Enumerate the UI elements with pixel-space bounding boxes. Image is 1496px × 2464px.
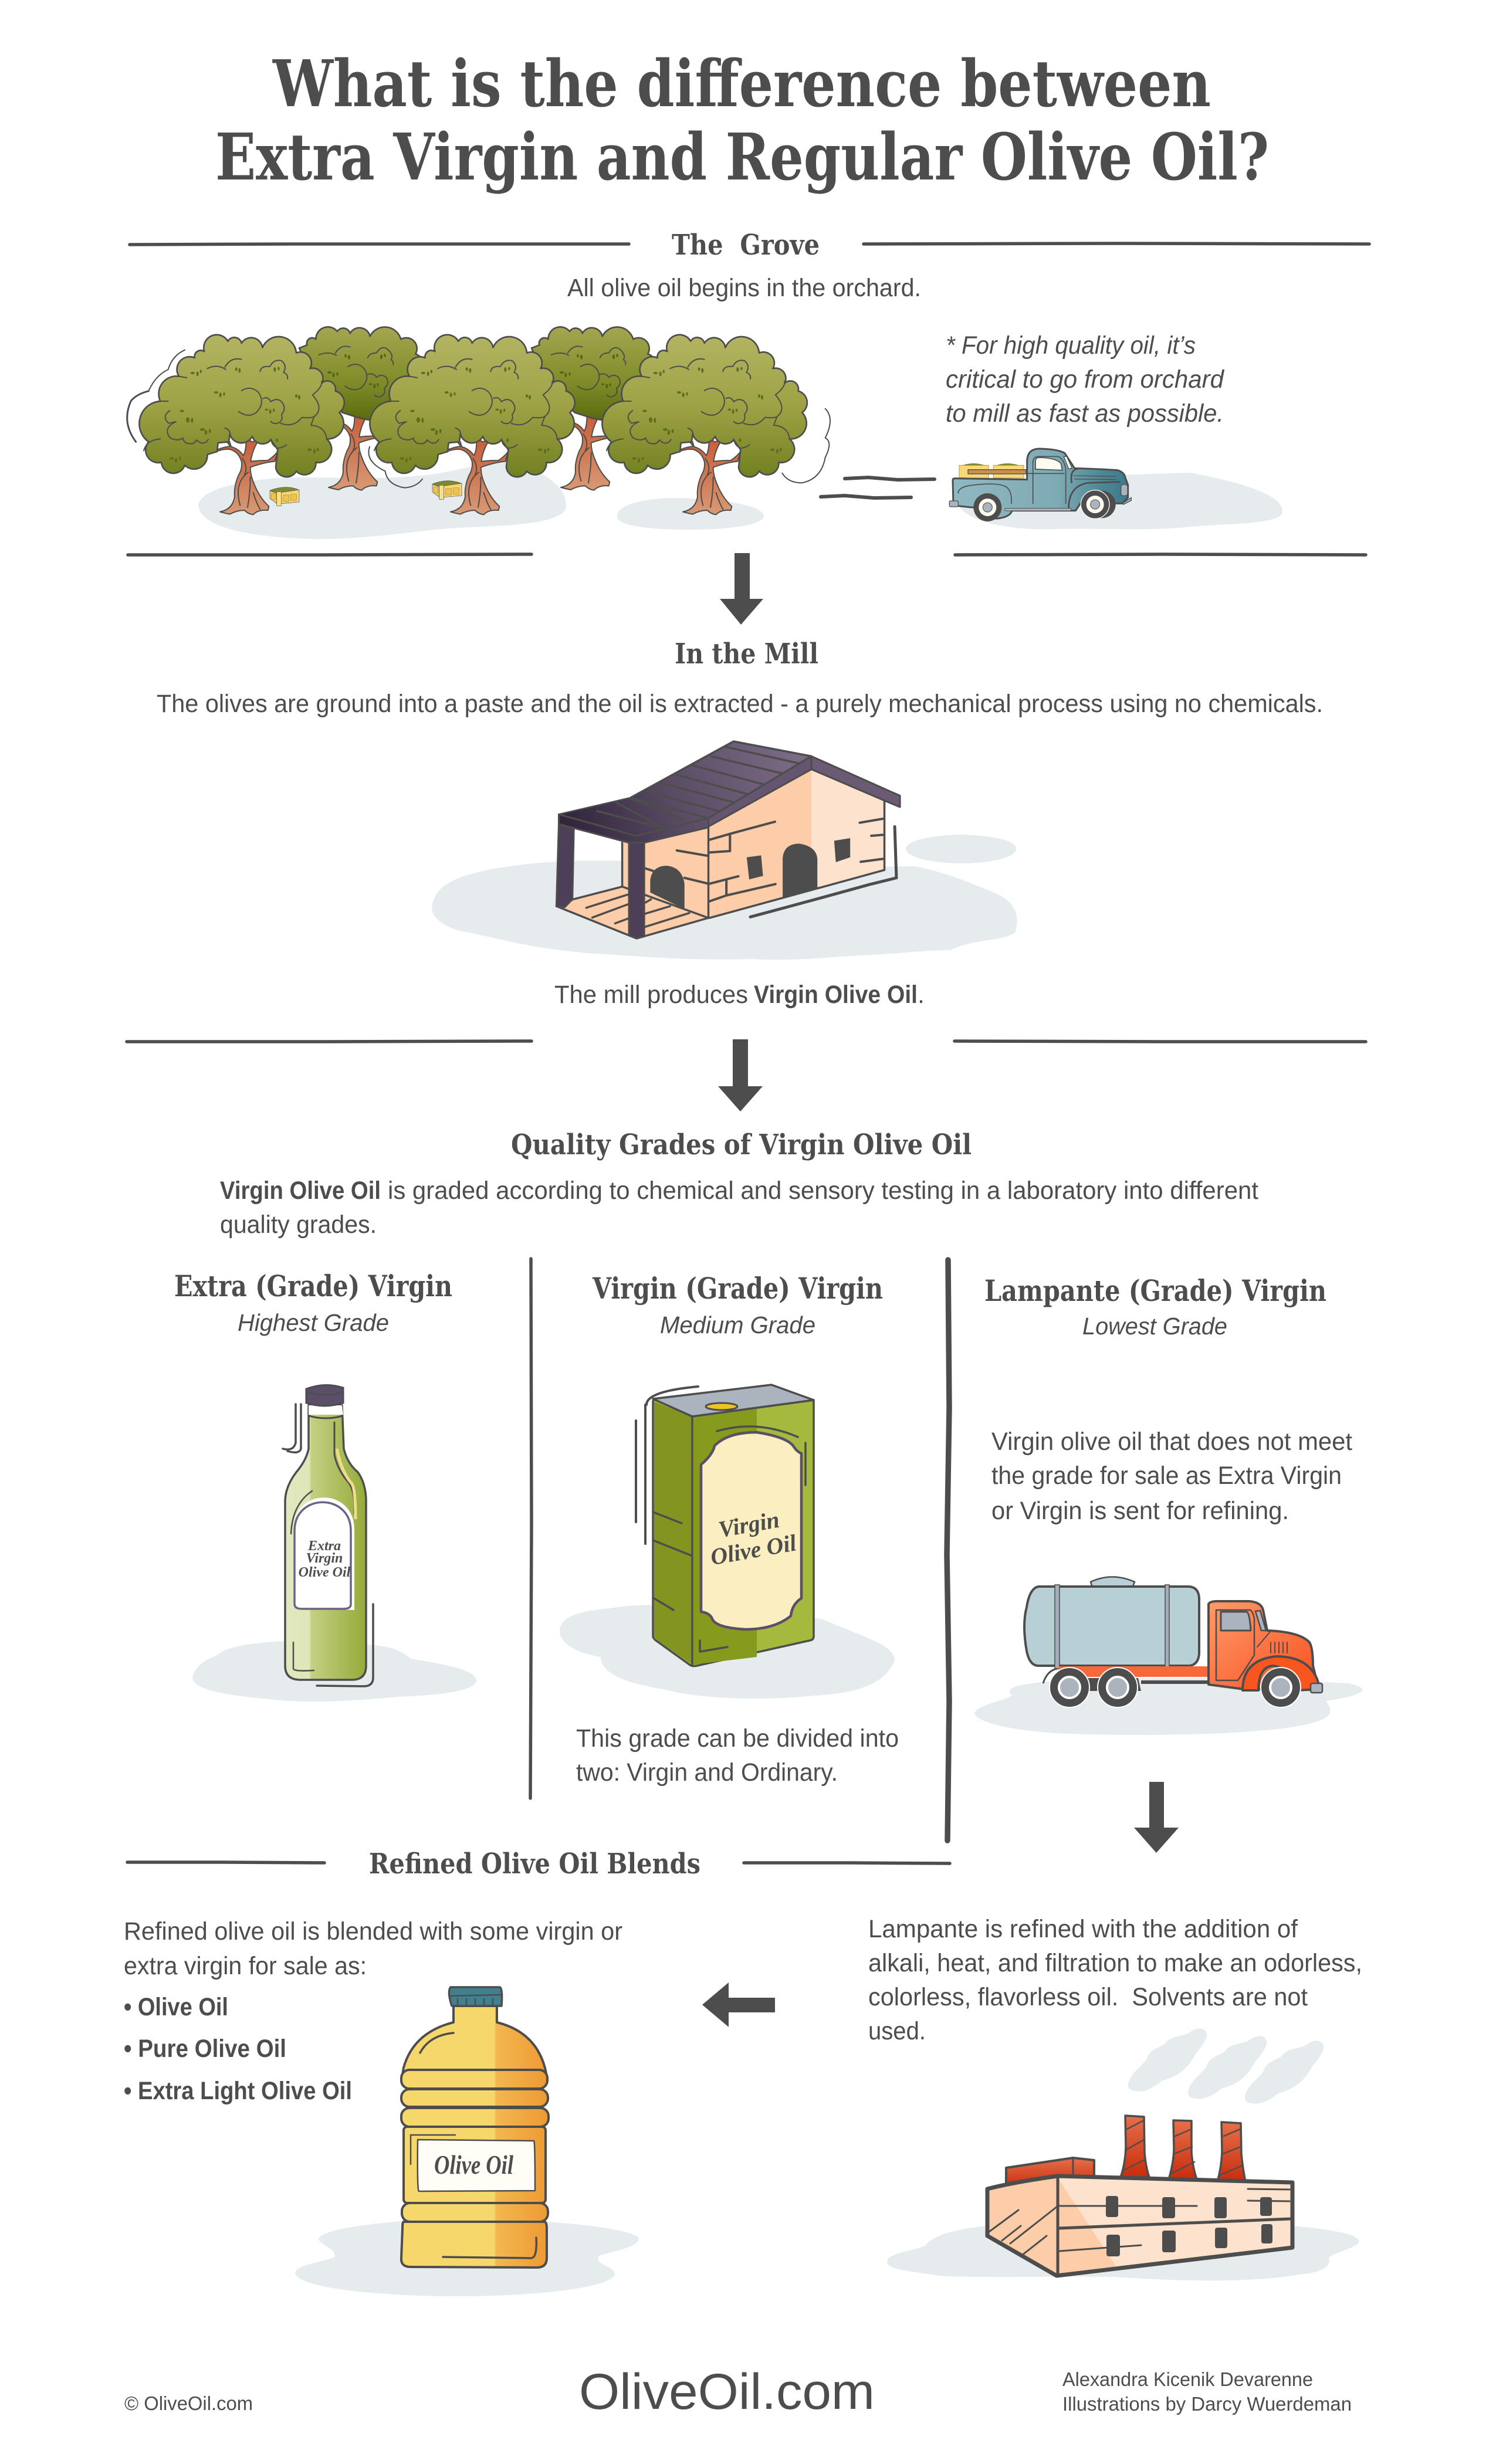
illustration: olive oil tin <box>636 1385 814 1666</box>
heading: extra virgin: Extra (Grade) Virgin <box>174 1269 452 1303</box>
panel: extra virgin <box>174 1269 476 1702</box>
illustration: olive oil jug: Olive Oil <box>434 2150 513 2180</box>
ground shadow: grove <box>198 460 566 539</box>
illustration: smoke <box>1128 2028 1324 2104</box>
illustration: olive oil tin: Virgin <box>716 1506 781 1543</box>
illustration: factory <box>987 2116 1292 2276</box>
heading: in the mill: In the Mill <box>675 638 818 670</box>
copyright: © OliveOil.com <box>124 2392 253 2414</box>
title <box>215 46 1269 195</box>
subheading: medium grade: Medium Grade <box>660 1311 815 1338</box>
text: lampante description: Virgin olive oil that does not meet <box>991 1428 1352 1456</box>
text: refining description: colorless, flavorless oil. Solvents are not <box>868 1983 1308 2011</box>
heading: quality grades: Quality Grades of Virgin Olive Oil <box>511 1128 972 1161</box>
text: mill description: The olives are ground into a paste and the oil is extracted - a purely mechanical process using no chemicals. <box>157 690 1323 718</box>
text: lampante description: or Virgin is sent for refining. <box>991 1497 1289 1525</box>
footer <box>124 2364 1352 2420</box>
divider <box>530 1259 532 1798</box>
panel: virgin grade <box>560 1271 899 1787</box>
text: grading intro: is graded according to chemical and sensory testing in a laboratory into different <box>388 1177 1258 1205</box>
arrow: grove to mill <box>720 553 763 625</box>
credits: Alexandra Kicenik Devarenne <box>1062 2368 1313 2390</box>
icon: motion dashes <box>821 477 935 498</box>
illustration: orchard trees <box>127 327 830 514</box>
text: lampante description: the grade for sale as Extra Virgin <box>991 1462 1342 1490</box>
text: mill output: . <box>918 981 925 1009</box>
divider <box>947 1260 949 1841</box>
ground shadow: truck <box>957 473 1282 529</box>
heading: refined olive oil blends with rules: Refined Olive Oil Blends <box>369 1848 700 1880</box>
icon: olive crates <box>270 481 462 506</box>
arrow: mill to quality grades <box>718 1039 763 1111</box>
text: virgin grade note: This grade can be divided into <box>576 1724 899 1753</box>
panel: quality grades <box>174 1128 1362 1853</box>
illustration: olive oil bottle: Virgin <box>306 1551 343 1566</box>
panel: the grove <box>127 229 1369 539</box>
illustration: tanker truck <box>1024 1577 1322 1707</box>
panel: lampante grade <box>974 1273 1362 1735</box>
illustration: olive oil tin: Olive Oil <box>709 1529 799 1570</box>
illustration: olive oil bottle: Extra <box>307 1538 341 1554</box>
ground shadow: small <box>906 835 1016 863</box>
title: Extra Virgin and Regular Olive Oil? <box>215 119 1269 195</box>
text: virgin grade note: two: Virgin and Ordinary. <box>576 1758 838 1787</box>
panel: refined olive oil blends <box>124 1848 950 2296</box>
text: orchard note <box>946 331 1225 428</box>
text: lampante description <box>991 1428 1352 1525</box>
text: grading intro <box>220 1177 1258 1239</box>
list: blend names: • Olive Oil <box>124 1993 228 2021</box>
list: blend names: • Extra Light Olive Oil <box>124 2077 352 2105</box>
text: grading intro: quality grades. <box>220 1211 377 1239</box>
text: orchard note: critical to go from orchard <box>946 365 1225 394</box>
panel: in the mill <box>157 638 1323 1009</box>
text: mill output: The mill produces <box>554 981 748 1009</box>
panel: refining <box>868 1915 1362 2280</box>
subheading: lowest grade: Lowest Grade <box>1082 1313 1227 1340</box>
subheading: highest grade: Highest Grade <box>238 1309 389 1336</box>
text: blends description <box>124 1917 622 1980</box>
text: blends description: extra virgin for sale as: <box>124 1952 367 1980</box>
heading: virgin grade: Virgin (Grade) Virgin <box>592 1271 883 1306</box>
site name: OliveOil.com <box>579 2364 875 2420</box>
rules under the mill <box>127 1041 1366 1042</box>
ground shadow: jug <box>295 2218 639 2296</box>
text: refining description: used. <box>868 2017 926 2045</box>
credits <box>1062 2368 1352 2415</box>
ground shadow: factory <box>887 2225 1359 2280</box>
illustration: pickup truck <box>949 449 1131 521</box>
text: grading intro: Virgin Olive Oil <box>220 1177 381 1205</box>
illustration: back trees <box>299 327 656 490</box>
illustration: motion lines behind trees <box>127 350 830 488</box>
text: virgin grade note <box>576 1724 899 1787</box>
text: orchard intro: All olive oil begins in the orchard. <box>567 274 921 302</box>
illustration: olive oil bottle <box>283 1385 373 1686</box>
illustration: olive oil bottle: Olive Oil <box>299 1565 351 1580</box>
arrow: tanker to refinery <box>1134 1782 1179 1853</box>
text: blends description: Refined olive oil is blended with some virgin or <box>124 1917 622 1946</box>
list: blend names: • Pure Olive Oil <box>124 2035 286 2063</box>
text: refining description: Lampante is refined with the addition of <box>868 1915 1298 1943</box>
text: orchard note: to mill as fast as possible. <box>946 399 1224 428</box>
ground shadow: mill <box>432 860 1017 960</box>
illustration: front olive trees <box>139 335 807 514</box>
heading: the grove with rules: The Grove <box>672 229 820 262</box>
text: refining description <box>868 1915 1362 2045</box>
ground shadow: can <box>560 1605 895 1699</box>
ground shadow: tanker <box>974 1677 1362 1735</box>
ground shadow: right tree <box>617 498 764 530</box>
heading: lampante grade: Lampante (Grade) Virgin <box>984 1273 1326 1308</box>
title: What is the difference between <box>272 46 1211 121</box>
list: blend names <box>124 1993 352 2105</box>
text: orchard note: * For high quality oil, it’s <box>946 331 1196 360</box>
arrow: refined oil to blends <box>702 1982 775 2027</box>
illustration: mill building <box>556 741 900 938</box>
illustration: olive oil jug <box>401 1987 549 2268</box>
credits: Illustrations by Darcy Wuerdeman <box>1062 2393 1352 2415</box>
text: refining description: alkali, heat, and filtration to make an odorless, <box>868 1949 1362 1977</box>
ground shadow: bottle <box>192 1641 476 1702</box>
text: mill output: Virgin Olive Oil <box>754 981 918 1009</box>
rules under the grove <box>128 554 1366 555</box>
text: mill output <box>554 981 925 1009</box>
